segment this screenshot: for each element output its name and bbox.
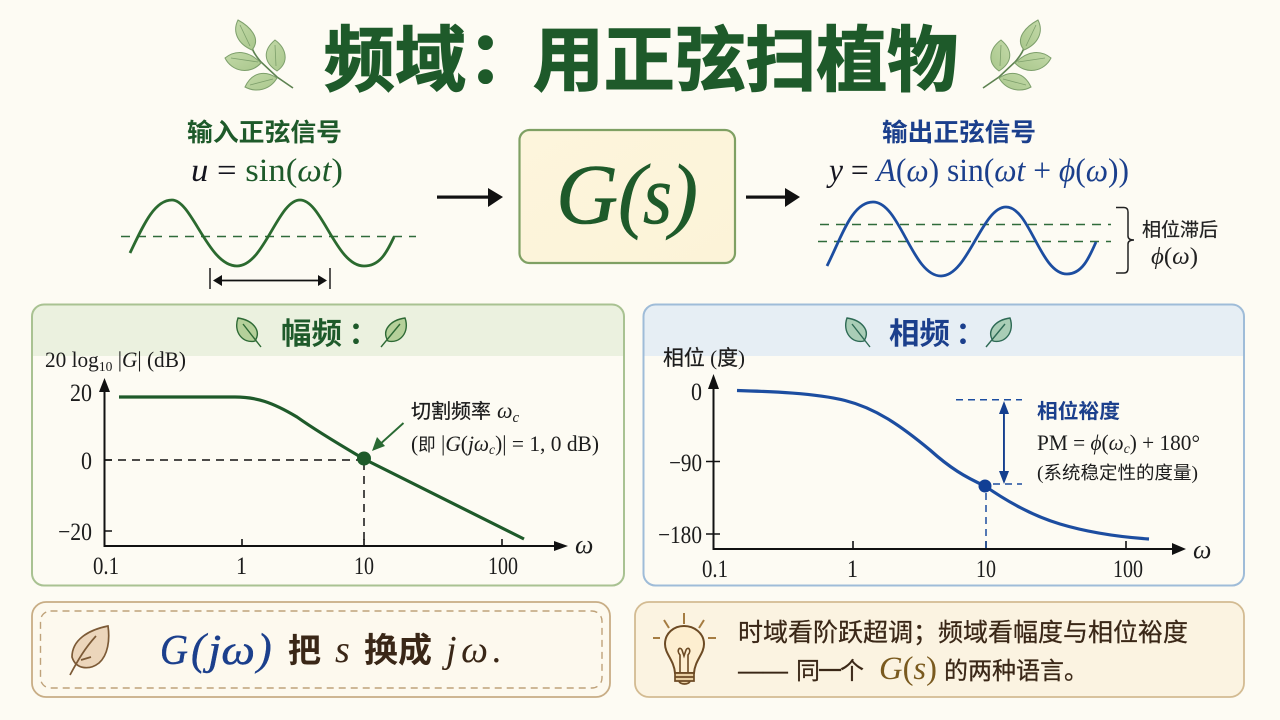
title: ： (450, 5, 521, 107)
callout text: G (160, 628, 188, 674)
phase margin annotation (1037, 399, 1200, 484)
phase margin annotation: 相位裕度 (1037, 399, 1120, 423)
y axis label: 相位 (度) (663, 346, 745, 370)
callout: takeaway (635, 602, 1244, 697)
phase margin arrow (999, 401, 1009, 484)
phase margin annotation: ) + 180° (1130, 430, 1200, 455)
bode magnitude chart: ω (575, 530, 593, 559)
bode magnitude chart: 100 (488, 553, 518, 580)
panel: phase response (644, 304, 1244, 586)
takeaway text (738, 619, 1188, 687)
phase lag label (1142, 219, 1218, 270)
phase lag brace (1116, 208, 1134, 273)
output heading: 输出正弦信号 (882, 119, 1036, 147)
input formula: u = sin(ωt) (191, 153, 343, 189)
bode magnitude chart: 0.1 (93, 553, 119, 580)
period arrow (210, 268, 330, 289)
phase margin annotation: c (1124, 442, 1130, 457)
input signal group (121, 119, 416, 289)
input heading: 输入正弦信号 (187, 119, 342, 147)
cutoff annotation: 切割频率 (411, 400, 491, 423)
arrow: input to system (437, 188, 503, 207)
bode phase chart: 0.1 (702, 556, 728, 583)
title: 频域 (324, 22, 466, 101)
callout text: ( (191, 625, 208, 674)
phase margin annotation: PM = ϕ(ω (1037, 430, 1124, 455)
callout: substitution (32, 602, 610, 697)
input sine wave (121, 200, 416, 266)
takeaway text: 时域看阶跃超调；频域看幅度与相位裕度 (738, 619, 1188, 647)
callout text: ) (254, 625, 272, 674)
phase heading (889, 310, 978, 354)
bode phase chart: 10 (976, 556, 996, 583)
icon: header leaf right (986, 318, 1011, 347)
bode phase chart: 100 (1113, 556, 1143, 583)
system box G(s): s (643, 149, 672, 242)
callout text: 把 (288, 632, 321, 669)
phase heading: 相频 (889, 318, 950, 351)
y axis label: 10 (99, 360, 112, 375)
cutoff annotation: ω (497, 398, 513, 423)
callout text: 换成 (364, 632, 432, 670)
magnitude heading: ： (341, 310, 371, 354)
bode magnitude chart: 10 (354, 553, 374, 580)
cutoff arrow (372, 423, 404, 451)
bode phase chart (658, 374, 1211, 583)
phase heading: ： (948, 310, 978, 354)
bode phase chart: −90 (669, 450, 702, 477)
bode magnitude chart: 20 (70, 380, 92, 407)
system box G(s) (520, 130, 735, 263)
bode magnitude chart (58, 378, 593, 580)
icon: header leaf right (381, 318, 406, 347)
icon: header leaf left (237, 318, 261, 347)
cutoff annotation: )| = 1, 0 dB) (495, 431, 599, 456)
takeaway text: 同一个 (796, 658, 864, 685)
cutoff annotation: c (489, 443, 496, 458)
output sine wave (818, 202, 1111, 276)
output signal group (818, 119, 1218, 276)
callout text: jω. (441, 629, 502, 671)
bode magnitude chart: −20 (58, 519, 92, 546)
magnitude heading: 幅频 (281, 318, 342, 351)
cutoff annotation: (即 |G(jω (411, 431, 490, 456)
panel: magnitude response (32, 304, 624, 586)
icon: left leaf sprig (225, 20, 293, 90)
icon: header leaf left (846, 318, 870, 347)
arrow: system to output (746, 188, 800, 207)
y axis label: 20 log (45, 347, 101, 372)
magnitude heading (281, 310, 371, 354)
phase margin annotation: (系统稳定性的度量) (1037, 463, 1198, 484)
output formula: y = A(ω) sin(ωt + ϕ(ω)) (826, 153, 1129, 189)
title (324, 5, 958, 107)
takeaway text: 的两种语言。 (944, 658, 1088, 685)
bode phase chart: −180 (658, 522, 702, 549)
system box G(s): G (556, 146, 618, 242)
bode phase chart: 0 (691, 379, 702, 406)
callout text: jω (202, 628, 255, 674)
callout text (160, 625, 502, 674)
bode magnitude chart: 0 (81, 448, 92, 475)
takeaway text: —— (738, 657, 788, 685)
icon: right leaf sprig (983, 20, 1051, 90)
takeaway text: G(s) (879, 651, 937, 687)
bode phase chart: 1 (847, 556, 858, 583)
title: 用正弦扫植物 (533, 22, 958, 101)
y axis label: | (112, 347, 122, 372)
y axis label: G| (dB) (122, 347, 188, 372)
bode phase chart: ω (1193, 535, 1211, 564)
bode magnitude chart: 1 (236, 553, 247, 580)
callout text: s (335, 629, 350, 671)
system box G(s): ) (666, 148, 698, 241)
icon: light bulb (653, 613, 716, 684)
icon: brown leaf (70, 626, 109, 675)
phase lag label: 相位滞后 (1142, 219, 1218, 241)
system box G(s): ( (618, 148, 651, 241)
phase lag label: ϕ(ω) (1151, 244, 1198, 270)
cutoff annotation: c (513, 410, 520, 426)
cutoff annotation (411, 398, 599, 458)
